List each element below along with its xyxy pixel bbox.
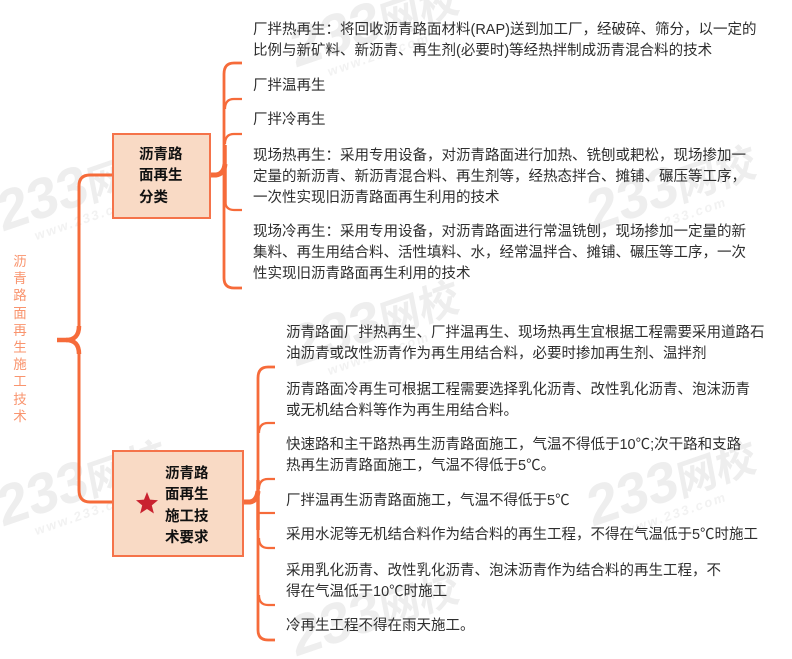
text: requirement 2	[286, 381, 750, 419]
watermarks: 233网校	[285, 260, 463, 379]
text: requirement 3	[286, 436, 741, 474]
root title: 技	[13, 392, 27, 407]
text: requirement 7: 冷再生工程不得在雨天施工。	[286, 618, 474, 634]
watermarks: www.233.com	[33, 489, 138, 539]
root title: 面	[13, 306, 27, 321]
icon: red star	[136, 492, 158, 514]
heading: requirements: 沥青路	[165, 466, 208, 482]
text: plant hot recycling	[253, 21, 756, 59]
root title: 施	[13, 357, 27, 372]
text: in-place hot recycling: 一次性实现旧沥青路面再生利用的技术	[253, 190, 500, 206]
root title: 生	[13, 340, 27, 355]
heading: classification: 沥青路	[139, 147, 182, 163]
text: requirement 1: 油沥青或改性沥青作为再生用结合料，必要时掺加再生剂、温拌剂	[286, 346, 706, 362]
text: in-place cold recycling	[253, 223, 746, 282]
heading: classification: 面再生	[139, 168, 182, 184]
text: requirement 6	[286, 562, 721, 600]
watermarks: 233网校	[582, 125, 760, 244]
text: in-place cold recycling: 集料、再生用结合料、活性填料、水，经常温拌合、摊铺、碾压等工序，一次	[253, 245, 746, 261]
text: requirement 4: 厂拌温再生沥青路面施工，气温不得低于5℃	[286, 493, 570, 509]
root title	[13, 254, 27, 424]
text: plant hot recycling: 厂拌热再生：将回收沥青路面材料(RAP)送到加工厂，经破碎、筛分，以一定的	[253, 22, 756, 38]
heading: requirements: 面再生	[165, 487, 208, 503]
text: in-place cold recycling: 性实现旧沥青路面再生利用的技术	[253, 266, 470, 282]
watermarks: www.233.com	[623, 489, 728, 539]
watermarks: www.233.com	[326, 30, 431, 80]
text: requirement 2: 沥青路面冷再生可根据工程需要选择乳化沥青、改性乳化沥青、泡沫沥青	[286, 382, 750, 398]
text: requirement 1	[286, 324, 764, 362]
watermarks: www.233.com	[326, 329, 431, 379]
panel: requirements box	[112, 450, 244, 557]
root title: 再	[13, 323, 27, 338]
watermarks: www.233.com	[33, 194, 138, 244]
text: plant cold recycling: 厂拌冷再生	[253, 112, 326, 128]
root title: 青	[13, 271, 27, 286]
text: requirement 3: 热再生沥青路面施工，气温不得低于5℃。	[286, 458, 555, 474]
root title: 路	[13, 288, 27, 303]
heading: classification	[139, 146, 182, 206]
root title: 沥	[13, 254, 27, 269]
text: requirement 2: 或无机结合料等作为再生用结合料。	[286, 403, 518, 419]
text: in-place hot recycling	[253, 147, 746, 206]
watermarks: www.233.com	[623, 194, 728, 244]
panel: classification box	[112, 133, 211, 219]
root title: 工	[13, 374, 27, 389]
text: requirement 1: 沥青路面厂拌热再生、厂拌温再生、现场热再生宜根据工程需要采用道路石	[286, 325, 764, 341]
text: in-place cold recycling: 现场冷再生：采用专用设备，对沥青路面进行常温铣刨，现场掺加一定量的新	[253, 224, 746, 240]
text: in-place hot recycling: 现场热再生：采用专用设备，对沥青路面进行加热、铣刨或耙松，现场掺加一	[253, 148, 746, 164]
text: requirement 6: 采用乳化沥青、改性乳化沥青、泡沫沥青作为结合料的再生工程，不	[286, 563, 721, 579]
text: requirement 5: 采用水泥等无机结合料作为结合料的再生工程，不得在气温低于5℃时施工	[286, 527, 758, 543]
heading: requirements	[165, 465, 208, 546]
text: requirement 3: 快速路和主干路热再生沥青路面施工，气温不得低于10℃;次干路和支路	[286, 437, 741, 453]
text: requirement 6: 得在气温低于10℃时施工	[286, 584, 447, 600]
root title: 术	[13, 409, 27, 424]
heading: requirements: 术要求	[165, 530, 208, 546]
text: in-place hot recycling: 定量的新沥青、新沥青混合料、再生剂等，经热态拌合、摊铺、碾压等工序，	[253, 169, 746, 185]
watermarks: 233网校	[582, 420, 760, 539]
text: plant hot recycling: 比例与新矿料、新沥青、再生剂(必要时)等经热拌制成沥青混合料的技术	[253, 43, 712, 59]
text: plant warm recycling: 厂拌温再生	[253, 78, 326, 94]
heading: requirements: 施工技	[165, 509, 208, 525]
heading: classification: 分类	[139, 190, 168, 206]
